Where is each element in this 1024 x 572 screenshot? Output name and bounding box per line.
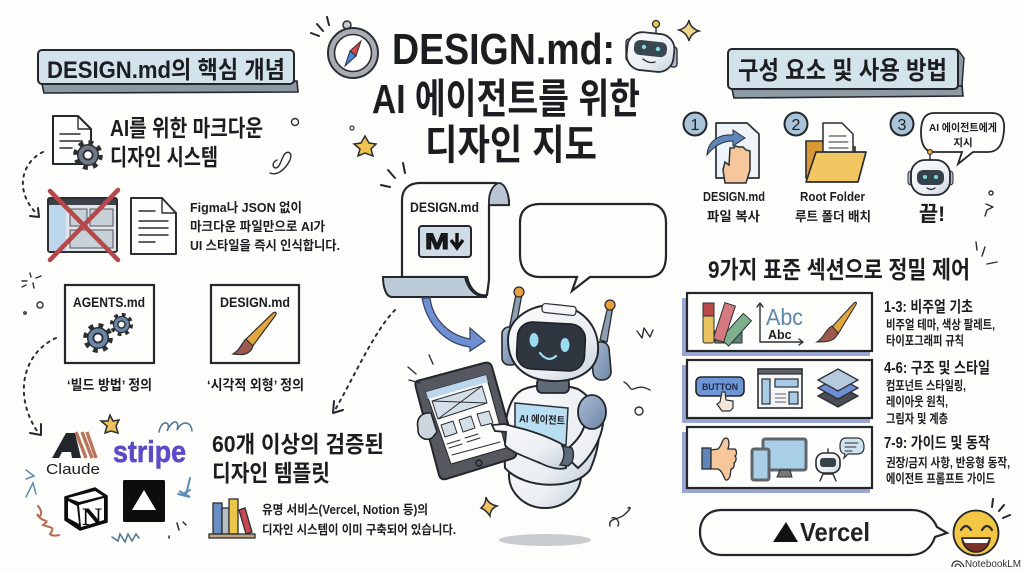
heading: components and usage <box>728 49 964 98</box>
icon: layers <box>818 369 858 407</box>
card: AGENTS.md: AGENTS.md <box>73 294 145 310</box>
text: no figma or json: 마크다운 파일만으로 AI가 <box>190 219 325 234</box>
icon: DESIGN.md scroll: DESIGN.md <box>410 199 479 215</box>
text: structure and style: 컴포넌트 스타일링, <box>886 379 966 393</box>
logo: Notion cube: N <box>82 504 102 531</box>
tablet <box>415 363 516 479</box>
icon: typography: Abc <box>768 328 792 342</box>
title: DESIGN.md: <box>392 25 615 74</box>
robot hands and left arm <box>417 413 573 469</box>
robot head <box>502 303 612 381</box>
decorations: right doodles <box>976 191 997 264</box>
step 3: instruct agent: 지시 <box>953 137 973 149</box>
decorations: left doodles <box>22 118 298 314</box>
step 1: copy file <box>684 112 765 224</box>
card: sections 1-3 <box>682 293 995 356</box>
icon: star <box>101 415 119 433</box>
text: structure and style <box>884 359 990 426</box>
title: 디자인 지도 <box>425 122 597 168</box>
panel: center title and robot <box>311 17 699 546</box>
step 2: root folder: 2 <box>792 117 801 134</box>
icon: small robot head <box>625 20 677 73</box>
subheading: markdown design system: AI를 위한 마크다운 <box>110 115 263 141</box>
robot antennae <box>509 287 615 342</box>
title <box>372 25 640 168</box>
card: AGENTS.md <box>65 285 154 393</box>
text: structure and style: 레이아웃 원칙, <box>886 394 948 409</box>
heading: core concepts <box>38 50 298 93</box>
arrow: dashed to robot <box>333 310 395 413</box>
text: no figma or json: Figma나 JSON 없이 <box>190 200 302 215</box>
card: DESIGN.md: ‘시각적 외형’ 정의 <box>207 377 304 393</box>
robot floor shadow <box>499 534 591 546</box>
text: guide and behaviour <box>884 434 1010 486</box>
text: guide and behaviour: 7-9: 가이드 및 동작 <box>884 434 990 452</box>
card: sections 7-9 <box>682 427 1010 493</box>
step 1: copy file: 파일 복사 <box>707 209 760 224</box>
arrow: dashed to UI comparison <box>23 152 43 217</box>
subheading: 60 plus templates <box>212 431 384 486</box>
logo: stripe: stripe <box>113 434 186 469</box>
title: AI 에이전트를 위한 <box>372 76 640 122</box>
heading: nine standard sections: 9가지 표준 섹션으로 정밀 제어 <box>708 257 970 284</box>
logo group: services <box>26 415 192 542</box>
step 1: copy file: DESIGN.md <box>703 190 765 204</box>
robot neck <box>537 378 569 393</box>
arrow: dashed to logos <box>24 338 56 435</box>
step 3: instruct agent: 3 <box>898 117 907 134</box>
icon: typography <box>757 303 803 345</box>
decorations: center doodles <box>408 328 653 526</box>
step 2: root folder: Root Folder <box>800 190 865 204</box>
text: famous services <box>262 503 456 537</box>
icon: responsive devices <box>752 439 806 480</box>
icon: robot with chat bubble <box>816 438 864 481</box>
text: visual basics: 타이포그래피 규칙 <box>886 333 964 348</box>
panel: left core concepts <box>22 50 456 542</box>
speech bubble: Vercel: Vercel <box>800 517 870 547</box>
text: visual basics: 비주얼 테마, 색상 팔레트, <box>886 317 995 332</box>
arrow: scroll to robot <box>422 298 485 351</box>
subheading: 60 plus templates: 60개 이상의 검증된 <box>212 431 384 457</box>
speech bubble: Vercel <box>700 510 947 555</box>
card: DESIGN.md: DESIGN.md <box>220 294 290 310</box>
step 3: instruct agent <box>890 112 1004 226</box>
icon: button with pointer <box>696 377 744 411</box>
heading: components and usage: 구성 요소 및 사용 방법 <box>738 57 947 85</box>
text: no figma or json <box>190 200 340 253</box>
card: sections 4-6 <box>682 359 990 426</box>
text: famous services: 디자인 시스템이 이미 구축되어 있습니다. <box>262 522 456 537</box>
icon: smiling emoji <box>954 499 1010 556</box>
icon: star with dot <box>350 126 376 156</box>
illustration: robot with tablet <box>415 287 615 508</box>
subheading: markdown design system <box>110 115 263 170</box>
robot torso <box>504 385 599 485</box>
text: structure and style: 4-6: 구조 및 스타일 <box>884 359 990 377</box>
robot right arm <box>562 395 606 468</box>
step 2: root folder: 루트 폴더 배치 <box>795 209 871 224</box>
robot lower body <box>509 442 581 508</box>
text: visual basics <box>884 298 995 348</box>
icon: paintbrush <box>817 302 856 342</box>
card: AGENTS.md: ‘빌드 방법’ 정의 <box>67 377 152 393</box>
step 3: instruct agent: AI 에이전트에게 <box>929 121 997 134</box>
icon: thumbs up and down <box>702 438 736 480</box>
logo: Vercel square <box>123 480 165 522</box>
icon: document with gear <box>53 116 100 167</box>
icon: books <box>209 499 255 538</box>
text: visual basics: 1-3: 비주얼 기초 <box>884 298 973 316</box>
icon: typography: Abc <box>766 304 803 330</box>
watermark: NotebookLM: NotebookLM <box>965 558 1021 570</box>
icon: compass <box>311 17 378 78</box>
icon: sparkle <box>679 20 699 41</box>
logo: Claude <box>46 432 100 478</box>
icon: color swatches <box>703 303 751 346</box>
robot chest plate: AI 에이전트 <box>519 412 566 427</box>
icon: markdown document <box>131 198 176 254</box>
card: DESIGN.md <box>207 285 304 393</box>
panel: right usage <box>682 49 1021 570</box>
icon: DESIGN.md scroll <box>381 163 509 297</box>
icon: layout <box>758 369 802 408</box>
robot chest plate <box>515 403 568 445</box>
icon: crossed out design tool <box>48 190 118 260</box>
icon: sparkle near robot <box>481 497 497 516</box>
step 3: instruct agent: 끝! <box>919 203 945 226</box>
subheading: 60 plus templates: 디자인 템플릿 <box>212 460 330 486</box>
text: structure and style: 그림자 및 계층 <box>886 412 948 426</box>
text: guide and behaviour: 에이전트 프롬프트 가이드 <box>886 471 995 486</box>
text: famous services: 유명 서비스(Vercel, Notion 등)의 <box>262 503 428 517</box>
speech bubble: empty <box>520 204 666 291</box>
heading: core concepts: DESIGN.md의 핵심 개념 <box>47 57 285 84</box>
subheading: markdown design system: 디자인 시스템 <box>110 144 218 170</box>
step 2: root folder <box>784 112 871 224</box>
step 1: copy file: 1 <box>691 117 700 134</box>
icon: button with pointer: BUTTON <box>702 382 738 393</box>
text: no figma or json: UI 스타일을 즉시 인식합니다. <box>190 238 340 253</box>
logo: Notion cube <box>65 488 107 531</box>
icon: DESIGN.md scroll: M <box>425 229 449 254</box>
decorations: squiggles <box>26 422 192 542</box>
logo: Claude: Claude <box>46 461 100 478</box>
